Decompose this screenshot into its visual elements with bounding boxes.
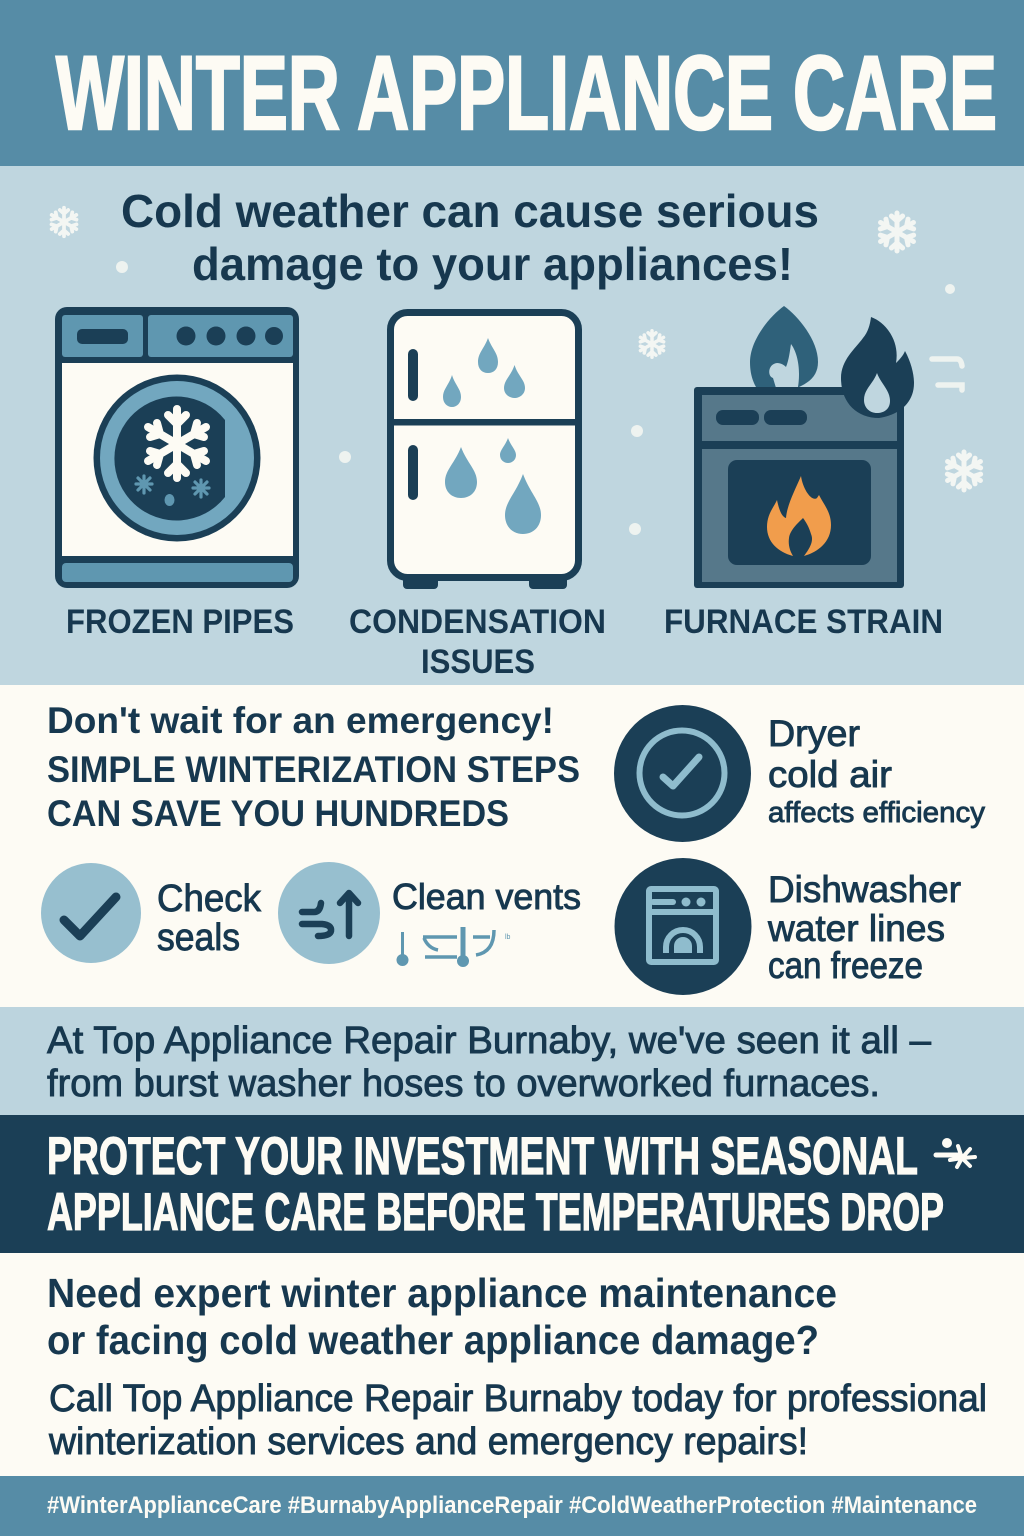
label: condensation issues: [349, 603, 606, 681]
panel: cold weather damage: [50, 185, 983, 681]
text: dishwasher water lines: water lines: [767, 908, 945, 949]
text: dryer cold air: cold air: [768, 754, 892, 795]
heading: cold weather warning: [121, 185, 819, 290]
heading: cold weather warning: damage to your appliances!: [192, 238, 793, 290]
label: furnace strain: FURNACE STRAIN: [664, 603, 943, 641]
panel: protect your investment banner: [0, 1115, 1024, 1253]
call to action: winterization services and emergency repairs!: [48, 1421, 808, 1463]
icon: snow splat: [936, 1138, 975, 1167]
label: frozen pipes: FROZEN PIPES: [66, 603, 294, 641]
text: dishwasher water lines: [767, 869, 961, 986]
step: clean vents: Clean vents: [392, 876, 581, 917]
icon: thermometer and pipes: [398, 927, 511, 966]
text: dishwasher water lines: Dishwasher: [768, 869, 961, 910]
text: dishwasher water lines: can freeze: [768, 945, 923, 986]
text block: experience statement: At Top Appliance Repair Burnaby, we've seen it all –: [47, 1020, 932, 1062]
panel: winterization steps: [41, 700, 986, 995]
heading: don't wait: CAN SAVE YOU HUNDREDS: [47, 793, 509, 834]
text block: experience statement: [47, 1020, 932, 1105]
text block: experience statement: from burst washer hoses to overworked furnaces.: [47, 1063, 880, 1105]
call to action: or facing cold weather appliance damage?: [47, 1317, 819, 1363]
decorative snowflakes and dots: [50, 208, 983, 535]
header banner: [0, 0, 1024, 166]
call to action: Call Top Appliance Repair Burnaby today for professional: [49, 1378, 987, 1420]
heading: cold weather warning: Cold weather can cause serious: [121, 185, 819, 237]
call to action: Need expert winter appliance maintenance: [47, 1270, 837, 1316]
icon: frozen washer: [55, 307, 299, 588]
label: condensation issues: ISSUES: [421, 643, 535, 681]
icon: dryer check: [614, 705, 751, 842]
step: check seals: [41, 863, 262, 963]
step: check seals: seals: [157, 917, 240, 959]
step: check seals: Check: [157, 878, 262, 920]
text: dryer cold air: affects efficiency: [768, 797, 986, 829]
icon: thermometer and pipes: lb: [505, 934, 511, 941]
heading: don't wait: [47, 700, 580, 834]
icon: furnace with flames: [694, 306, 914, 588]
heading: don't wait: Don't wait for an emergency!: [47, 700, 554, 741]
step: clean vents: [278, 862, 581, 966]
label: condensation issues: CONDENSATION: [349, 603, 606, 641]
icon: fridge with condensation: [390, 312, 578, 589]
text: dryer cold air: [768, 713, 986, 829]
text: dryer cold air: Dryer: [768, 713, 860, 754]
call to action: [47, 1270, 987, 1463]
footer hashtags: [0, 1476, 1024, 1536]
icon: dishwasher: [614, 858, 752, 995]
heading: don't wait: SIMPLE WINTERIZATION STEPS: [47, 749, 580, 790]
